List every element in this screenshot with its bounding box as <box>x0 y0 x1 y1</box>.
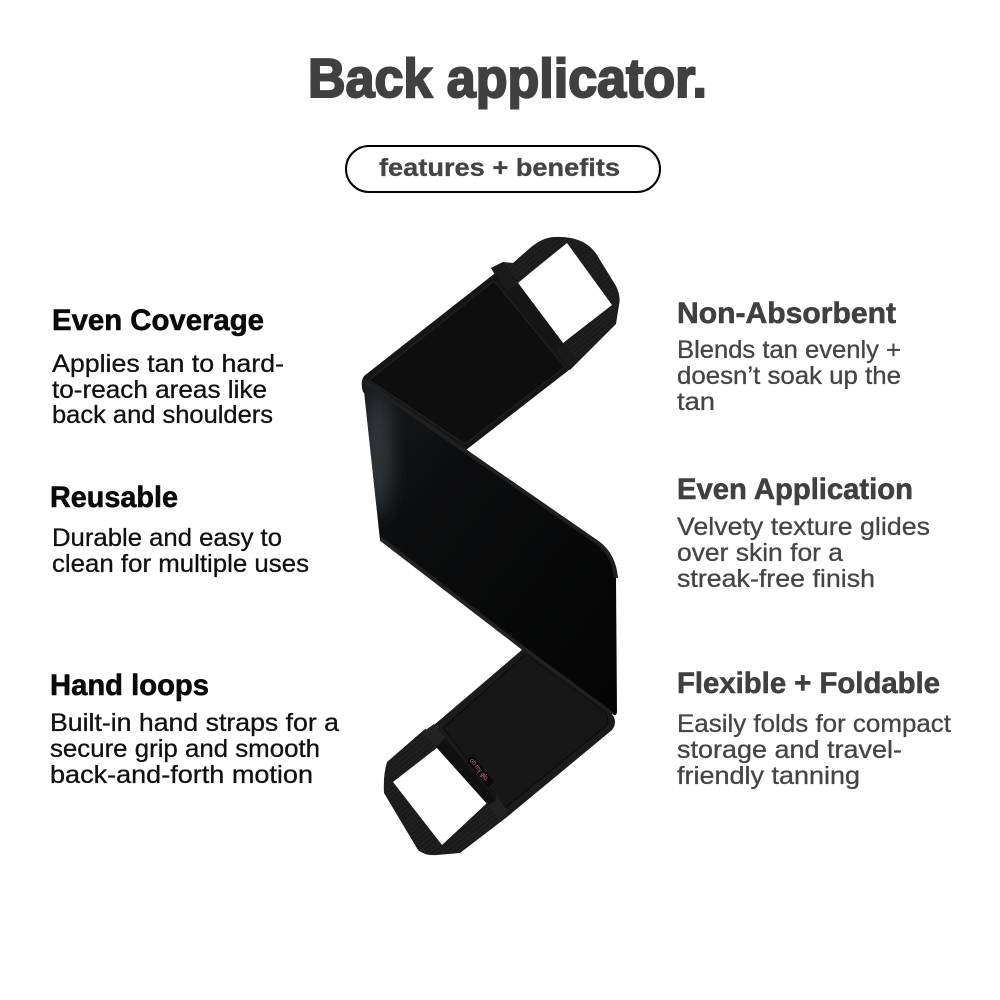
text: flexible and foldable description: Easily folds for compact <box>677 710 951 738</box>
text: even application description <box>677 513 930 593</box>
heading: non-absorbent: Non-Absorbent <box>677 297 896 330</box>
text: even coverage description <box>52 350 284 429</box>
text: non-absorbent description <box>677 336 901 416</box>
text: even application description: over skin for a <box>677 539 843 567</box>
top hand loop <box>491 237 620 370</box>
top neoprene panel <box>362 274 571 450</box>
text: hand loops description: back-and-forth motion <box>50 761 313 789</box>
bottom strap bars <box>423 724 445 747</box>
text: even application description: Velvety texture glides <box>677 513 930 541</box>
heading: flexible and foldable: Flexible + Foldable <box>677 667 940 700</box>
text: flexible and foldable description: friendly tanning <box>677 762 860 790</box>
text: non-absorbent description: Blends tan evenly + <box>677 336 901 364</box>
left feature: hand loops <box>50 669 339 789</box>
left feature: even coverage <box>52 304 284 429</box>
subtitle pill: features + benefits <box>379 154 620 182</box>
text: even application description: streak-free finish <box>677 565 875 593</box>
title: Back applicator. <box>308 48 707 109</box>
text: reusable description: clean for multiple uses <box>52 550 309 578</box>
velvet band edge piping <box>364 381 616 578</box>
right feature: non-absorbent <box>677 297 901 416</box>
text: flexible and foldable description: storage and travel- <box>677 736 902 764</box>
heading: even coverage: Even Coverage <box>52 304 264 337</box>
text: hand loops description <box>50 709 339 789</box>
bottom neoprene panel <box>434 649 615 817</box>
right feature: flexible and foldable <box>677 667 951 790</box>
text: reusable description <box>52 524 309 578</box>
heading: hand loops: Hand loops <box>50 669 209 702</box>
velvet band <box>363 380 617 715</box>
product: back applicator strap <box>362 237 620 855</box>
top strap bars <box>491 262 518 291</box>
text: even coverage description: Applies tan to hard- <box>52 350 284 378</box>
bottom hand loop <box>384 729 507 855</box>
text: non-absorbent description: tan <box>677 388 715 416</box>
text: non-absorbent description: doesn’t soak up the <box>677 362 901 390</box>
brand tag: oh my glo. <box>468 757 490 783</box>
text: hand loops description: secure grip and smooth <box>50 735 320 763</box>
right feature: even application <box>677 473 930 593</box>
text: reusable description: Durable and easy to <box>52 524 282 552</box>
heading: even application: Even Application <box>677 473 913 506</box>
text: flexible and foldable description <box>677 710 951 790</box>
text: even coverage description: to-reach areas like <box>52 376 267 404</box>
velvet sheen <box>364 395 392 515</box>
text: hand loops description: Built-in hand straps for a <box>50 709 339 737</box>
heading: reusable: Reusable <box>50 481 178 514</box>
text: even coverage description: back and shoulders <box>52 401 273 429</box>
subtitle pill <box>346 146 660 192</box>
left feature: reusable <box>50 481 309 578</box>
